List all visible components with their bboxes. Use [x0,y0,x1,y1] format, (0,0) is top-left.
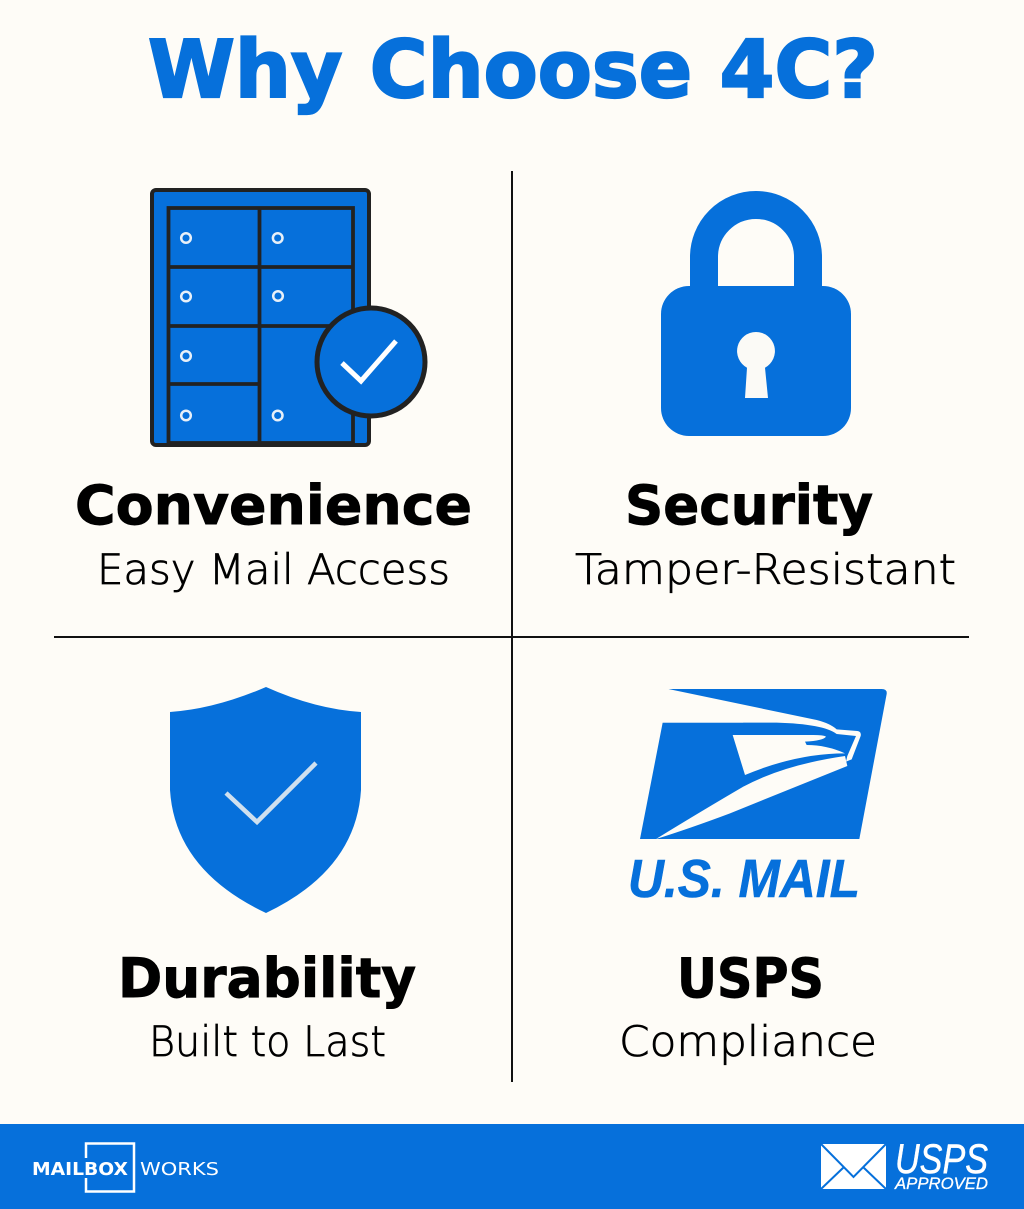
panel: convenience [75,190,472,594]
text: easy mail access: Easy Mail Access [97,545,450,594]
logo: mailbox works: WORKS [140,1159,219,1180]
icon: mailbox unit with check badge [152,190,425,445]
icon: shield with check [170,687,361,913]
title: Why Choose 4C? [148,24,878,116]
footer bar [0,1124,1024,1209]
text: compliance: Compliance [619,1017,877,1066]
text: tamper-resistant: Tamper-Resistant [575,545,956,594]
icon: us mail eagle logo [628,689,887,909]
heading: security: Security [625,474,873,537]
logo: usps approved: USPS [895,1135,988,1182]
heading: durability: Durability [118,947,416,1010]
heading: usps: USPS [677,947,824,1010]
icon: us mail eagle logo: U.S. MAIL [628,849,860,909]
logo: mailbox works [32,1144,219,1192]
heading: convenience: Convenience [75,474,472,537]
panel: durability [118,687,416,1066]
panel: security [575,205,956,594]
text: built to last: Built to Last [149,1017,386,1066]
logo: usps approved [821,1135,988,1193]
logo: mailbox works: MAILBOX [32,1159,128,1180]
logo: usps approved: APPROVED [894,1174,988,1193]
panel: usps compliance [619,689,887,1066]
icon: padlock [661,205,851,436]
